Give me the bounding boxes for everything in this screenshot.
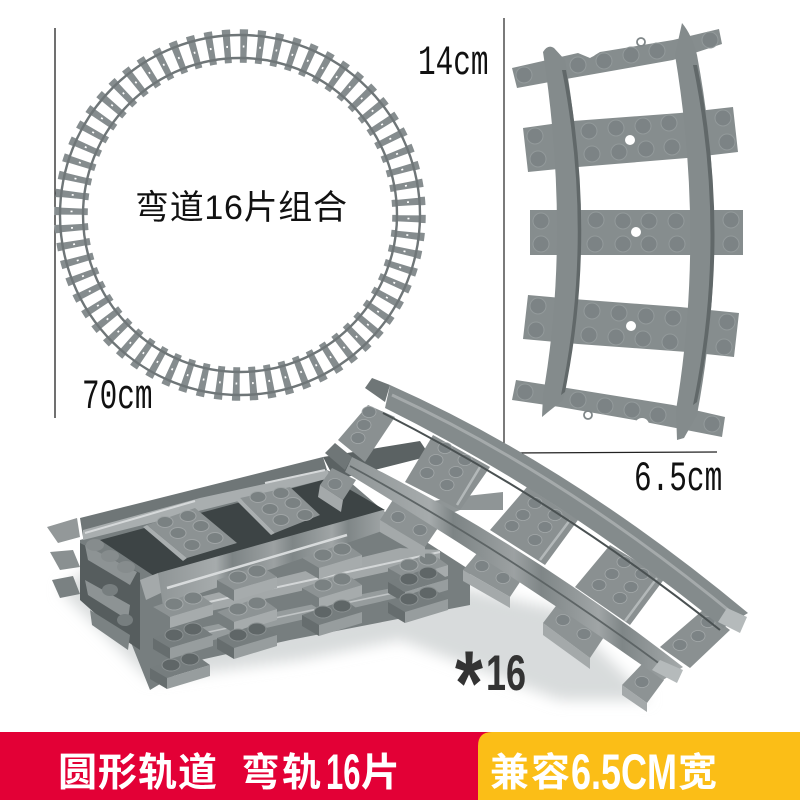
- sleepers: [512, 29, 743, 437]
- quantity label: *16: [455, 632, 526, 735]
- back rail of top piece: [47, 457, 330, 543]
- left rail: [542, 47, 580, 417]
- dimension line: ring diameter: [54, 28, 56, 418]
- front rail of top piece: [140, 510, 390, 606]
- holes: [625, 135, 641, 331]
- bottom banner: [0, 732, 800, 800]
- mounting notches and pins: [583, 38, 649, 432]
- label: 6.5cm: 6.5cm: [634, 455, 722, 503]
- banner text: compatibility: 兼容: [490, 752, 570, 795]
- track ring: 16 curved pieces: [57, 32, 423, 398]
- ring caption: 弯道16片组合: [135, 189, 347, 227]
- label: 70cm: 70cm: [82, 373, 153, 421]
- single curved track piece, top view: [512, 23, 743, 440]
- soft shadow: [60, 560, 650, 700]
- back rail: [385, 385, 748, 628]
- banner text: product: 片: [361, 752, 400, 795]
- leaning track piece: [318, 378, 748, 712]
- banner text: compatibility: 6.5CM: [571, 745, 677, 800]
- banner: red panel: [0, 732, 800, 800]
- dark back rail running under leaning piece: [323, 441, 430, 480]
- front rail: [345, 457, 683, 680]
- dimension lines: single piece: [504, 18, 717, 453]
- lower rails: [163, 548, 440, 650]
- label: 14cm: 14cm: [418, 39, 489, 87]
- sleeper blocks, lower rows: [150, 543, 448, 689]
- banner text: compatibility: 宽: [678, 752, 717, 795]
- sleeper decks: [338, 405, 730, 668]
- stack body: [80, 470, 470, 690]
- banner text: product: [58, 743, 400, 800]
- deck light edges: [457, 467, 657, 621]
- left end cluster: [50, 539, 140, 650]
- stack of curved tracks, photo: [47, 378, 748, 712]
- studs: [516, 32, 739, 432]
- banner text: compatibility: [490, 745, 717, 800]
- quantity label: *16: *: [455, 632, 484, 735]
- banner text: product: 圆形轨道: [58, 752, 217, 795]
- deck and windows of top piece: [100, 478, 385, 580]
- deck studs: [351, 406, 715, 650]
- banner text: product: 16: [326, 743, 360, 800]
- outer block studs: [328, 478, 649, 688]
- banner text: product: 弯轨: [241, 752, 321, 795]
- front rail end blocks: [325, 443, 352, 470]
- banner: yellow panel: [478, 732, 800, 800]
- stub rail on the far side: [410, 492, 503, 525]
- right rail: [675, 23, 714, 440]
- outer sleeper blocks: [318, 468, 664, 712]
- quantity label: *16: 16: [486, 646, 526, 701]
- back rail end blocks: [365, 378, 390, 402]
